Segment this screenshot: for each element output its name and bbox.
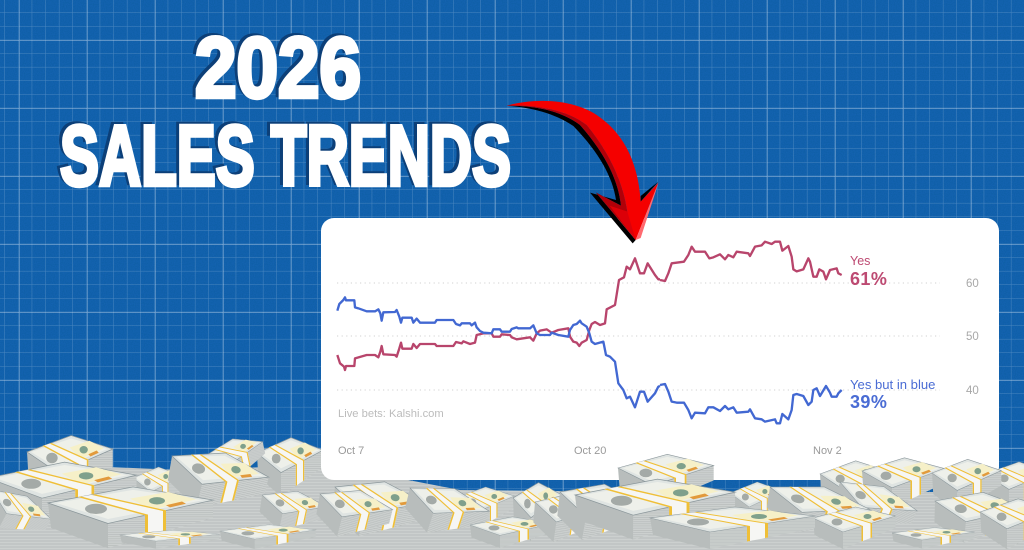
y-axis labels: 50	[966, 331, 979, 343]
y-axis labels	[966, 278, 979, 397]
x-axis labels	[338, 445, 842, 457]
label: Yes but in blue 39%: 39%	[850, 392, 887, 412]
pile of cash behind the card	[0, 433, 1024, 550]
y-axis labels: 40	[966, 385, 979, 397]
y-axis labels: 60	[966, 278, 979, 290]
arrow shadow	[507, 106, 658, 243]
title: 2026	[195, 21, 361, 116]
source note: Live bets: Kalshi.com	[338, 408, 444, 420]
label: Yes but in blue 39%: Yes but in blue	[850, 377, 935, 392]
arrow head shading	[611, 207, 636, 240]
red line: Yes	[337, 242, 842, 370]
x-axis labels: Nov 2	[813, 445, 842, 457]
title: SALES TRENDS	[60, 109, 511, 204]
gridlines	[337, 283, 940, 390]
x-axis labels: Oct 7	[338, 445, 364, 457]
blue line: Yes but in blue	[337, 297, 842, 423]
label: Yes but in blue 39%	[850, 377, 935, 412]
pile of cash in front of the card	[575, 454, 1024, 549]
label: Yes 61%	[850, 254, 887, 289]
arrow highlight	[636, 183, 658, 240]
arrow body	[507, 101, 658, 240]
arrow dark edge	[507, 105, 636, 240]
curved red arrow	[507, 101, 658, 243]
title	[57, 19, 511, 204]
label: Yes 61%: 61%	[850, 269, 887, 289]
title: 2026	[192, 19, 358, 114]
title: SALES TRENDS	[57, 107, 508, 202]
x-axis labels: Oct 20	[574, 445, 606, 457]
label: Yes 61%: Yes	[850, 254, 870, 268]
chart card	[321, 218, 999, 480]
